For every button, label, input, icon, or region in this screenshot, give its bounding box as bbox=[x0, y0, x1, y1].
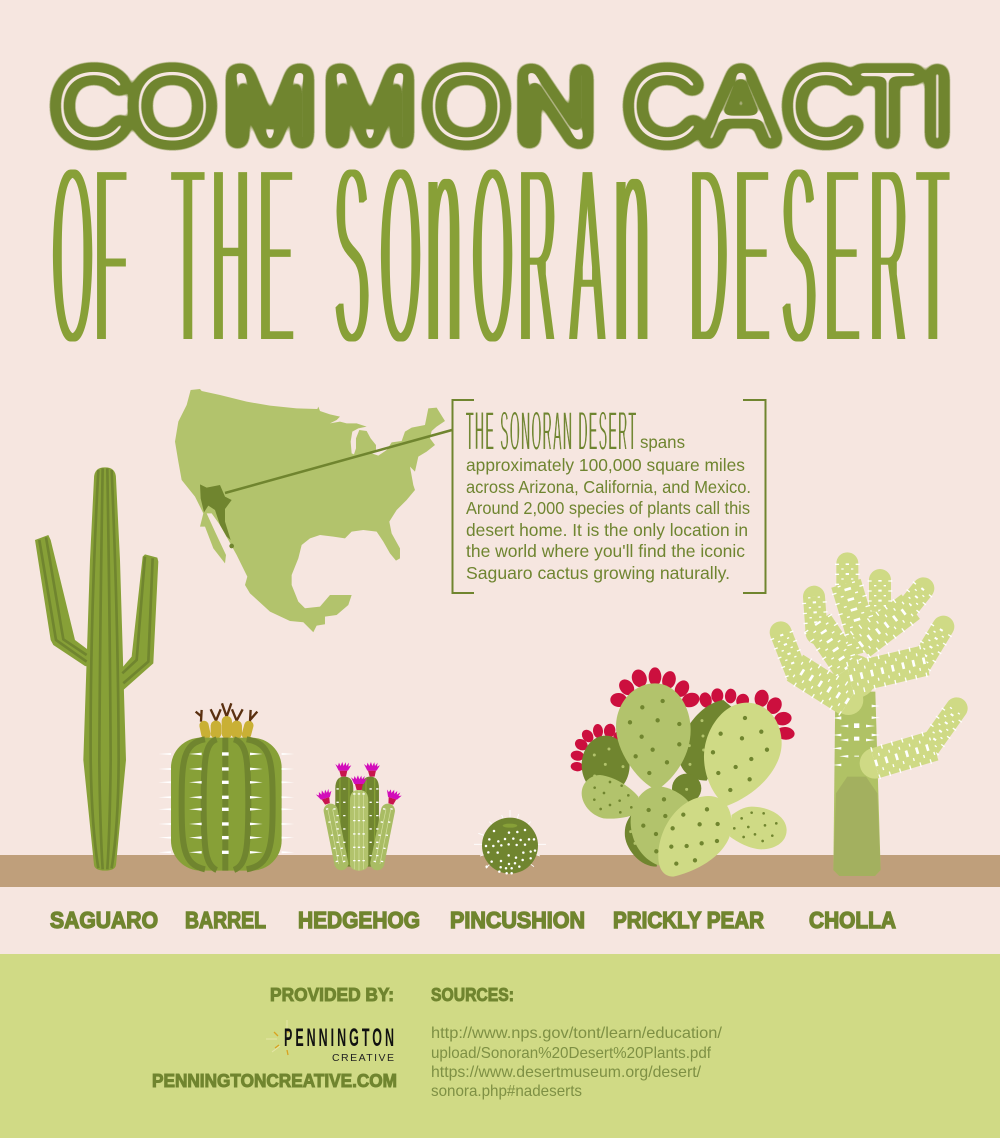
medium pads bbox=[582, 683, 693, 867]
callout body text: Saguaro cactus growing naturally. bbox=[466, 563, 730, 583]
callout brackets bbox=[452, 400, 766, 593]
cholla trunk spines bbox=[833, 705, 880, 766]
cactus: barrel bbox=[158, 703, 294, 871]
callout: the sonoran desert bbox=[452, 399, 766, 593]
pennington creative logo: CREATIVE bbox=[332, 1052, 394, 1064]
cholla central mass bbox=[833, 655, 890, 779]
source urls: http://www.nps.gov/tont/learn/education/ bbox=[431, 1025, 723, 1042]
cactus name labels: PINCUSHION bbox=[450, 907, 585, 933]
cholla arm: upper left bbox=[814, 597, 848, 668]
source urls: https://www.desertmuseum.org/desert/ bbox=[431, 1064, 702, 1081]
callout body text: approximately 100,000 square miles bbox=[466, 455, 745, 475]
cholla arm: lower right bbox=[875, 708, 957, 763]
provided by block bbox=[152, 985, 397, 1091]
dark back pads bbox=[582, 700, 743, 867]
cholla arm: small top bbox=[879, 580, 881, 612]
hedgehog flowers bbox=[315, 762, 403, 806]
cactus: pincushion bbox=[474, 810, 546, 874]
pennington creative logo bbox=[266, 1020, 394, 1064]
cactus name labels: BARREL bbox=[185, 907, 266, 933]
barrel flowers bbox=[196, 703, 257, 740]
pincushion spines bbox=[474, 810, 546, 868]
pincushion dots bbox=[486, 830, 535, 873]
sources block bbox=[431, 985, 723, 1100]
barrel spines bbox=[158, 752, 294, 854]
red fruit bbox=[570, 667, 795, 772]
source urls: sonora.php#nadeserts bbox=[431, 1083, 582, 1100]
cholla arm: top centre bbox=[846, 563, 867, 652]
subtitle: of the sonoran desert: OF THE SOnORAn DESERT bbox=[52, 55, 949, 413]
provided by block: PROVIDED BY: bbox=[270, 985, 394, 1005]
ground strip bbox=[0, 855, 1000, 887]
cactus name labels: CHOLLA bbox=[809, 907, 896, 933]
callout body text: desert home. It is the only location in bbox=[466, 520, 748, 540]
callout body text: Around 2,000 species of plants call this bbox=[466, 498, 750, 518]
cholla arm: far left bbox=[781, 632, 848, 702]
footer panel bbox=[0, 954, 1000, 1138]
cactus name labels: PRICKLY PEAR bbox=[613, 907, 764, 933]
pad areoles bbox=[594, 701, 776, 864]
light pads bbox=[658, 703, 787, 877]
cactus: prickly pear bbox=[570, 667, 795, 877]
callout body text bbox=[466, 432, 751, 583]
cactus name labels: HEDGEHOG bbox=[298, 907, 420, 933]
cactus name labels: SAGUARO bbox=[50, 907, 158, 933]
cactus: hedgehog bbox=[315, 762, 403, 871]
cactus: cholla bbox=[781, 563, 957, 876]
source urls bbox=[431, 1025, 723, 1100]
callout body text: across Arizona, California, and Mexico. bbox=[466, 477, 751, 497]
pennington creative logo: PENNINGTON bbox=[284, 1024, 394, 1052]
cactus name labels bbox=[50, 907, 896, 933]
cholla arm: upper right bbox=[860, 588, 923, 645]
callout body text: the world where you'll find the iconic bbox=[466, 541, 745, 561]
cactus: saguaro bbox=[35, 467, 158, 871]
cholla trunk bbox=[833, 692, 881, 876]
map leader line bbox=[225, 430, 452, 493]
map of north america bbox=[175, 389, 445, 632]
cholla arm: right bbox=[850, 627, 943, 678]
title: common cacti: COMMON CACTI bbox=[52, 48, 953, 164]
sonoran desert region bbox=[200, 484, 234, 548]
callout heading: THE SONORAN DESERT bbox=[466, 399, 636, 462]
sources block: SOURCES: bbox=[431, 985, 514, 1005]
provided by block: PENNINGTONCREATIVE.COM bbox=[152, 1071, 397, 1091]
callout body text: spans bbox=[640, 432, 685, 452]
source urls: upload/Sonoran%20Desert%20Plants.pdf bbox=[431, 1045, 712, 1062]
